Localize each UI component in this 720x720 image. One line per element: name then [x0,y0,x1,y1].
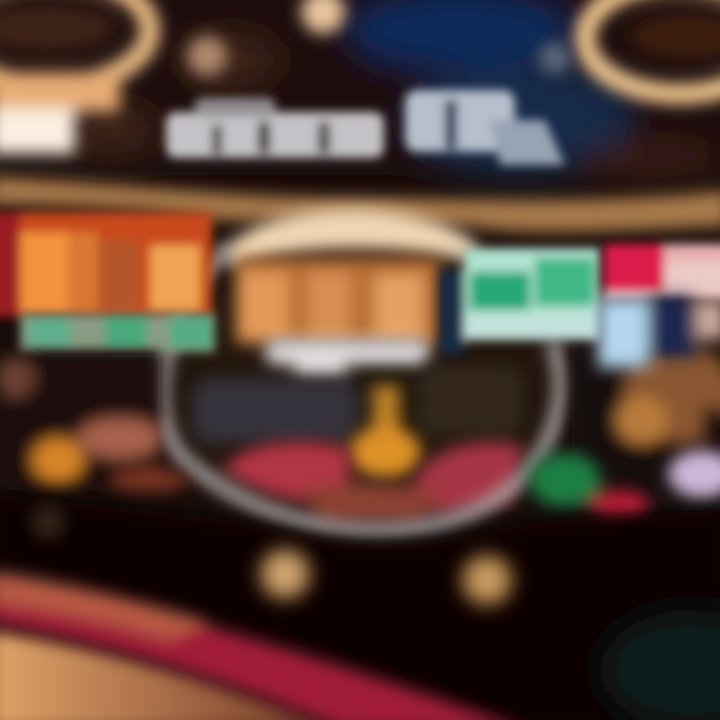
right crowd base [572,345,720,510]
panel: left green strip [20,314,215,352]
blurred sign heading [166,90,565,165]
panel: right lower colours [529,450,720,520]
right ceiling ring light [585,0,720,94]
central stage [155,208,565,531]
small dim dot [30,504,66,540]
left ceiling ring light [0,0,150,154]
ceiling spotlights [187,0,571,76]
upper tan band [0,176,720,232]
ceiling [0,0,720,178]
central orange screen [235,258,440,344]
left lower crowd [0,355,188,492]
red diagonal stripe [0,572,525,720]
arch top cream [222,208,478,268]
black lower band [0,495,720,720]
bottom right teal glow [600,610,720,720]
panel: left orange screens [0,212,212,317]
panel: right blue screen [598,296,720,368]
red floor [222,442,524,522]
gold figure [349,385,421,478]
central dark seating [192,365,523,444]
panel: right teal screen [440,248,600,354]
grey ring [162,248,561,531]
gold dot right [457,550,517,610]
central white band [265,338,430,378]
gold dot left [255,544,315,604]
panel: right pink screen [604,244,720,300]
bottom left floor [0,630,340,720]
central dark stage oval [155,250,565,530]
